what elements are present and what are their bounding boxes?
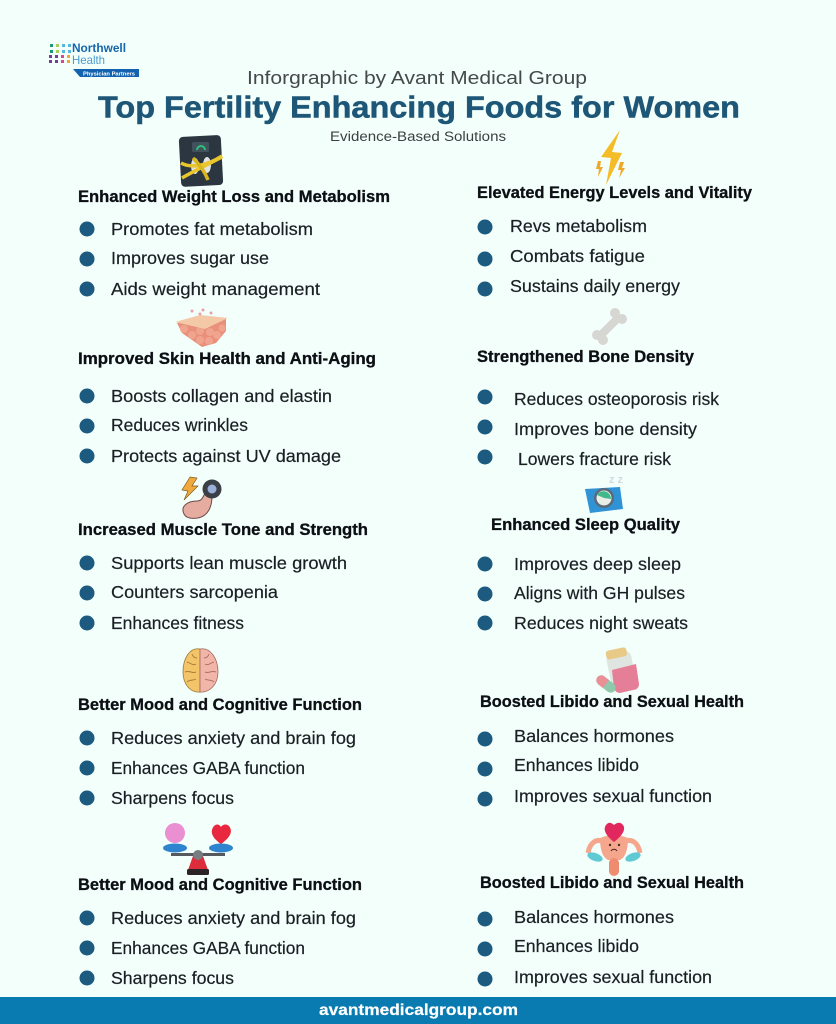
- panel: bone density: [477, 308, 719, 469]
- panel: energy and vitality: [477, 130, 753, 296]
- icon: lightning bolt: [596, 130, 625, 185]
- subtitle: infographic credit: Inforgraphic by Avant Medical Group: [247, 67, 587, 88]
- panel: mood and cognition (balance): [78, 823, 362, 988]
- list item: Enhances GABA function: [111, 938, 305, 958]
- heading: Boosted Libido and Sexual Health: [480, 874, 744, 892]
- panel: sleep quality: [478, 474, 688, 633]
- panel: libido and sexual health (uterus): [478, 823, 744, 987]
- list item: Combats fatigue: [510, 246, 645, 266]
- heading: Improved Skin Health and Anti-Aging: [78, 350, 376, 368]
- list item: Reduces night sweats: [514, 613, 688, 633]
- list item: Supports lean muscle growth: [111, 553, 347, 573]
- icon: supplement jar and capsule: [594, 647, 639, 695]
- title: Top Fertility Enhancing Foods for Women: [98, 90, 740, 124]
- list item: Improves sexual function: [514, 786, 712, 806]
- list item: Promotes fat metabolism: [111, 219, 313, 239]
- list item: Reduces osteoporosis risk: [514, 389, 719, 409]
- list item: Enhances libido: [514, 936, 639, 956]
- icon: balance scale with brain and heart: [163, 823, 233, 875]
- list item: Balances hormones: [514, 726, 674, 746]
- panel: mood and cognition: [78, 649, 362, 808]
- heading: Better Mood and Cognitive Function: [78, 696, 362, 714]
- list item: Counters sarcopenia: [111, 582, 278, 602]
- footer bar: avantmedicalgroup.com: [319, 1002, 518, 1019]
- panel: skin health: [78, 308, 376, 466]
- list item: Enhances fitness: [111, 613, 244, 633]
- icon: flexed arm with bolt and weight: [182, 477, 222, 518]
- list item: Enhances GABA function: [111, 758, 305, 778]
- list item: Aids weight management: [111, 279, 320, 299]
- icon: skin layers: [175, 308, 228, 347]
- heading: Strengthened Bone Density: [477, 348, 695, 366]
- list item: Reduces anxiety and brain fog: [111, 908, 356, 928]
- list item: Sharpens focus: [111, 788, 234, 808]
- list item: Reduces anxiety and brain fog: [111, 728, 356, 748]
- heading: Increased Muscle Tone and Strength: [78, 521, 368, 539]
- list item: Reduces wrinkles: [111, 415, 248, 435]
- list item: Lowers fracture risk: [518, 449, 671, 469]
- logo: Northwell Health Physician Partners: Northwell: [72, 43, 126, 55]
- panel: weight loss and metabolism: [78, 135, 390, 299]
- icon: pillow with alarm clock: z z: [609, 474, 624, 486]
- heading: Elevated Energy Levels and Vitality: [477, 184, 753, 202]
- icon: scale with measuring tape: [179, 135, 223, 187]
- icon: bone: [592, 308, 627, 345]
- list item: Improves deep sleep: [514, 554, 681, 574]
- list item: Improves sugar use: [111, 248, 269, 268]
- list item: Improves sexual function: [514, 967, 712, 987]
- list item: Enhances libido: [514, 755, 639, 775]
- logo: Northwell Health Physician Partners: [49, 43, 139, 78]
- list item: Protects against UV damage: [111, 446, 341, 466]
- icon: sad uterus with broken heart: [586, 823, 642, 876]
- list item: Improves bone density: [514, 419, 697, 439]
- list item: Aligns with GH pulses: [514, 583, 685, 603]
- footer bar: [0, 997, 836, 1024]
- panel: libido and sexual health: [478, 647, 744, 806]
- heading: Better Mood and Cognitive Function: [78, 876, 362, 894]
- list item: Sustains daily energy: [510, 276, 680, 296]
- panel: muscle tone: [78, 477, 368, 633]
- list item: Sharpens focus: [111, 968, 234, 988]
- heading: Boosted Libido and Sexual Health: [480, 693, 744, 711]
- list item: Revs metabolism: [510, 216, 647, 236]
- list item: Balances hormones: [514, 907, 674, 927]
- icon: brain: [183, 649, 218, 692]
- heading: Enhanced Sleep Quality: [491, 516, 681, 534]
- heading: Enhanced Weight Loss and Metabolism: [78, 188, 390, 206]
- tagline: Evidence-Based Solutions: [330, 129, 506, 144]
- logo: Northwell Health Physician Partners: Health: [72, 53, 105, 67]
- logo: Northwell Health Physician Partners: Physician Partners: [83, 72, 135, 78]
- list item: Boosts collagen and elastin: [111, 386, 332, 406]
- icon: pillow with alarm clock: [585, 474, 624, 513]
